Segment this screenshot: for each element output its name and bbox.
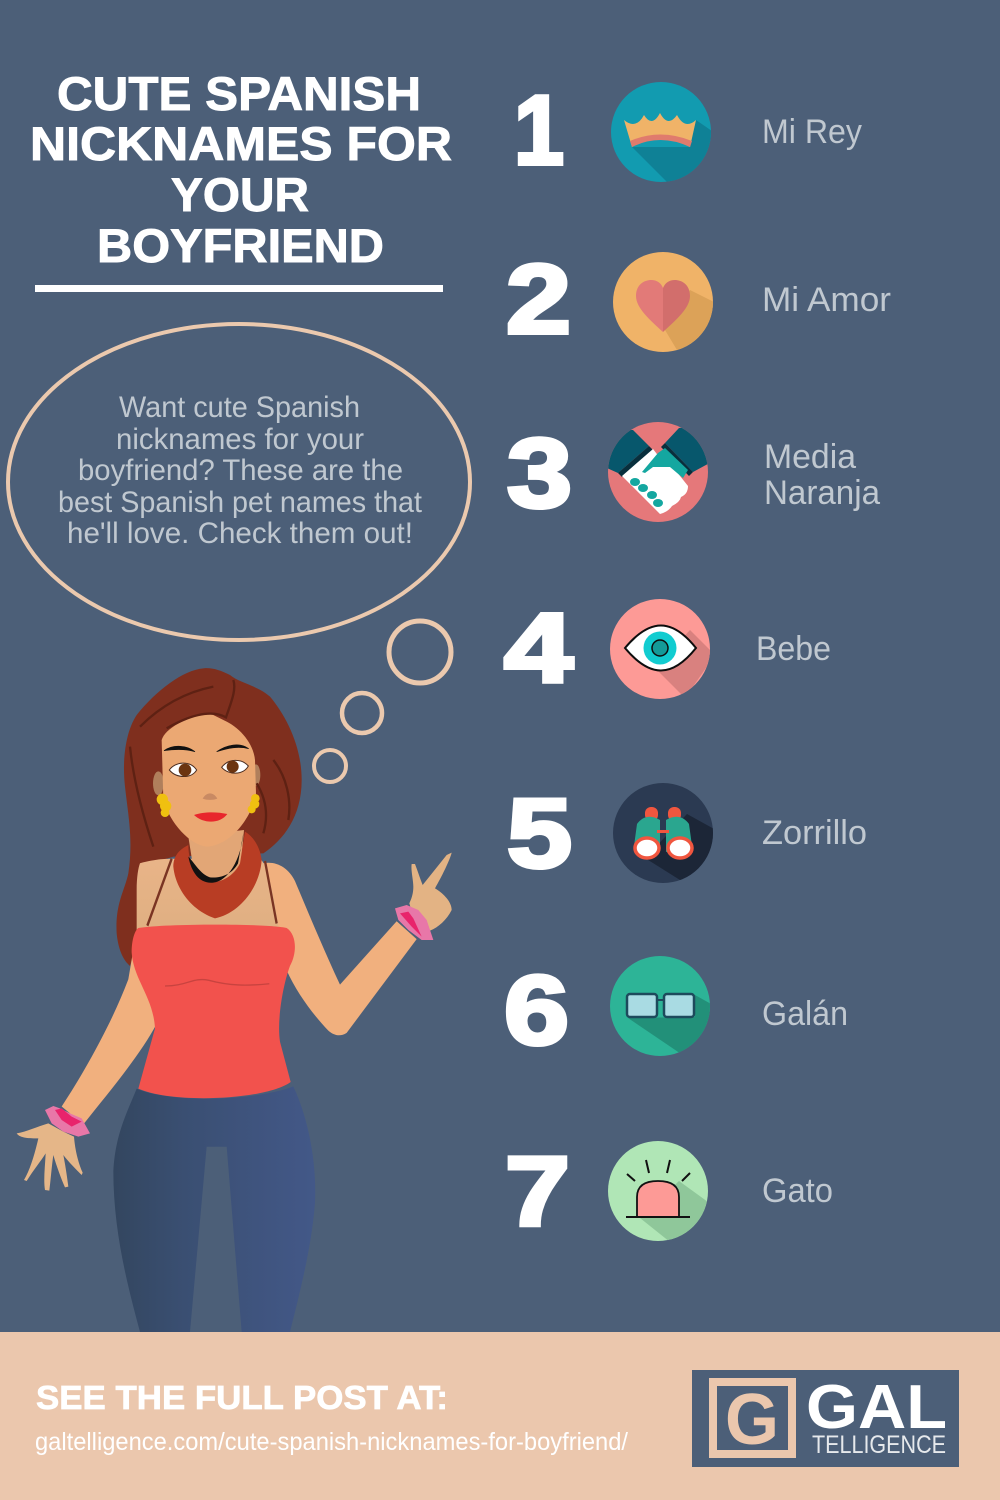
logo: G (725, 1380, 779, 1460)
label: Galán (762, 995, 848, 1033)
illustration: woman (17, 668, 452, 1332)
label: Bebe (756, 630, 831, 668)
label: Mi Rey (762, 113, 862, 151)
eyes (169, 760, 248, 776)
torso (137, 859, 290, 953)
label: Naranja (764, 474, 880, 512)
intro text: nicknames for your (116, 423, 364, 456)
item 1 (518, 82, 862, 182)
logo: TELLIGENCE (812, 1431, 946, 1459)
nose (203, 793, 217, 800)
number 1: 1 (514, 75, 564, 185)
icon: glasses (610, 956, 710, 1056)
scarf inner shadow (188, 833, 243, 883)
icon: handshake (608, 422, 708, 522)
icon: eye (610, 599, 715, 699)
left arm (62, 930, 157, 1124)
left hand (17, 1106, 90, 1191)
right scrunchie (395, 905, 433, 940)
number 3: 3 (507, 418, 572, 528)
top straps (147, 859, 277, 926)
intro text: Want cute Spanish (119, 391, 360, 424)
icon: siren (608, 1141, 708, 1241)
label: Zorrillo (762, 814, 867, 852)
item 4 (504, 593, 831, 703)
number 4: 4 (504, 593, 573, 703)
logo: GAL (806, 1373, 947, 1442)
right hand (395, 853, 452, 940)
icon: heart (613, 252, 713, 352)
number 7: 7 (505, 1136, 570, 1246)
earrings (157, 794, 260, 817)
face (162, 713, 256, 847)
right arm (263, 863, 417, 1035)
title: BOYFRIEND (97, 219, 384, 272)
jeans (113, 1086, 315, 1332)
title: NICKNAMES FOR (30, 117, 452, 170)
title (30, 67, 452, 272)
number 6: 6 (504, 955, 569, 1065)
top (132, 925, 295, 1098)
footer url: galtelligence.com/cute-spanish-nicknames-for-boyfriend/ (35, 1428, 628, 1456)
head and scarf (130, 680, 289, 918)
neck (188, 830, 244, 882)
number 5: 5 (507, 778, 572, 888)
label: Mi Amor (762, 281, 891, 319)
title: CUTE SPANISH (57, 67, 421, 120)
item 7 (508, 1141, 832, 1241)
label: Media (764, 438, 856, 476)
left scrunchie (45, 1106, 90, 1137)
title: YOUR (171, 168, 309, 221)
thought bubble (8, 324, 470, 782)
intro text: boyfriend? These are the (78, 454, 403, 487)
intro text: he'll love. Check them out! (67, 517, 413, 550)
label (764, 438, 880, 512)
number 2: 2 (506, 244, 571, 354)
item 5 (507, 778, 867, 888)
logo (692, 1370, 959, 1467)
item 2 (508, 252, 890, 352)
title underline (35, 285, 443, 292)
hair back (116, 668, 302, 966)
scarf (173, 832, 262, 918)
hair streaks (130, 680, 289, 847)
ears (153, 771, 164, 795)
footer band (0, 1332, 1000, 1500)
icon: crown (611, 82, 711, 182)
item 6 (506, 956, 846, 1056)
item 3 (507, 418, 880, 528)
body (62, 859, 417, 1332)
footer heading: SEE THE FULL POST AT: (36, 1379, 448, 1416)
label: Gato (762, 1172, 833, 1210)
intro text: best Spanish pet names that (58, 486, 423, 519)
icon: binoculars (613, 783, 713, 883)
intro text (58, 391, 423, 550)
eyebrows (164, 745, 249, 752)
lips (194, 812, 227, 822)
